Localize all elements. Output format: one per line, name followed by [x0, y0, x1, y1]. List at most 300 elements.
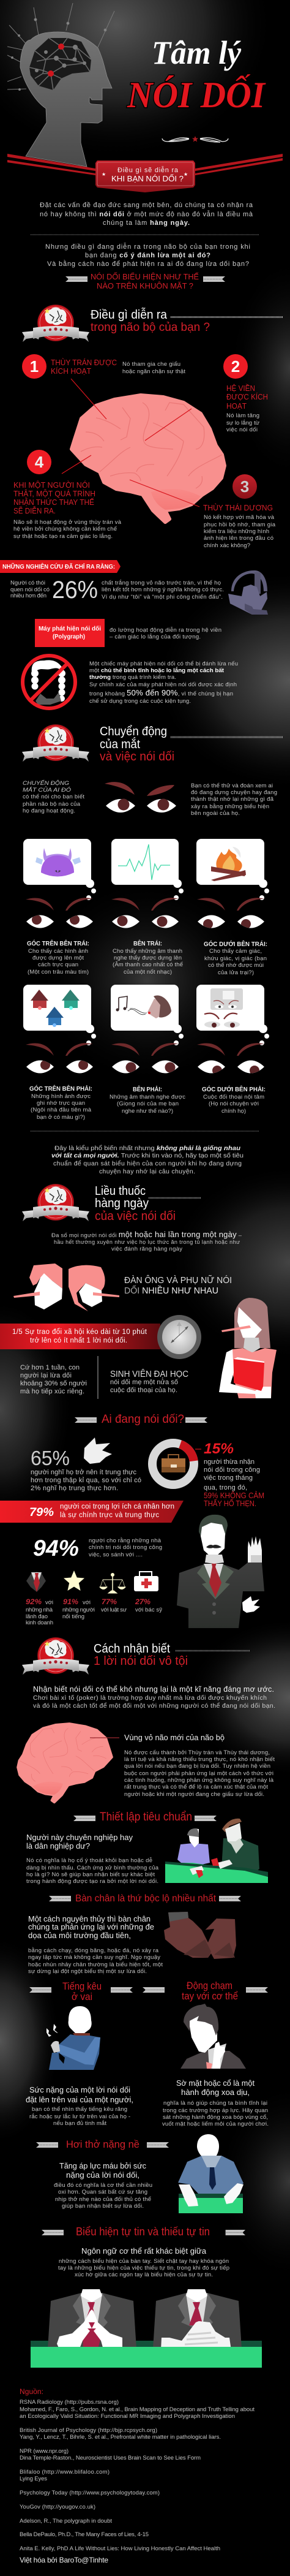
stat: 26 percent: Ví dụ như “tôi” và “một phi công chiến đấu”. — [102, 594, 223, 600]
callout 1: frontal lobe: Nó tham gia che giấu — [122, 361, 180, 368]
icon: purple buffalo — [35, 848, 81, 876]
callout 3: temporal lobe: THÙY THÁI DƯƠNG — [203, 503, 273, 512]
stat text: 15 percent at work: người thừa nhận — [204, 1458, 255, 1466]
stat: thirty percent: người lại lừa dối — [20, 1372, 72, 1379]
intro text: chúng ta làm hàng ngày. — [103, 219, 190, 227]
icon: business suit — [26, 1572, 46, 1592]
stat: college students: nói dối mẹ một nửa số — [110, 1379, 178, 1386]
heading: daily dose of lying — [95, 1184, 201, 1223]
icon: scales — [100, 1574, 125, 1593]
note paragraph — [51, 1145, 244, 1175]
baseline text: trong hành động được tạo ra bởi một lời nói dối. — [26, 1878, 158, 1885]
panel: upper right eye movement: bạn ở có màu gì?) — [37, 1114, 85, 1121]
stat: 65 percent: 65% — [31, 1447, 70, 1469]
feet text — [28, 1914, 163, 1975]
stat: college students: SINH VIÊN ĐẠI HỌC — [110, 1369, 188, 1379]
polygraph accuracy text: trong khoảng 50% đến 90%, vì thế chúng bị hạn — [89, 688, 233, 697]
feet text: Một cách nguyên thủy thì bàn chân — [28, 1914, 151, 1923]
baseline text: họ là gì? Nó sẽ giúp bạn nhận biết sự khác biệt — [26, 1871, 155, 1878]
confidence text: Ngôn ngữ cơ thể rất khác biệt giữa — [81, 2246, 207, 2256]
panel: upper left eye movement: Cho thấy các hình ảnh — [28, 948, 88, 955]
breathing text: nhịp thở nhẹ nào của đối thủ có thể — [55, 2196, 151, 2203]
icon: music and speaking face — [116, 995, 171, 1018]
note paragraph: chuyện hay nhớ lại câu chuyện. — [99, 1168, 195, 1175]
soothing text: nghĩa là nó giúp chúng ta bình tĩnh lại — [163, 2100, 267, 2107]
leader lines — [62, 379, 199, 507]
breathing text: nặng của lời nói dối, — [66, 2170, 139, 2180]
stat: 27 percent: với bác sỹ — [135, 1607, 162, 1613]
banner: research shows: NHỮNG NGHIÊN CỨU ĐÃ CHỈ RA RẰNG: — [2, 563, 115, 570]
heading: what happens in the brain: Điều gì diễn ra — [91, 308, 168, 322]
suit: confident steeple — [48, 2289, 136, 2352]
callout 3: temporal lobe: chính xác không? — [204, 542, 250, 549]
sources: Mohamed, F., Faro, S., Gordon, N. et al., Brain Mapping of Deception and Truth Telling about — [20, 2406, 255, 2413]
stat: 91 percent: những người — [62, 1607, 95, 1613]
heading: detecting a white lie: Cách nhận biết — [94, 1642, 170, 1656]
stat: 27 percent: 27% — [135, 1599, 151, 1606]
stat: 65 percent — [31, 1438, 141, 1492]
stat text: 15 percent at work: 15% — [204, 1441, 234, 1457]
heading: eye movements: của mắt — [100, 737, 140, 751]
breathing text: điều đó có nghĩa là cơ thể cần nhiều — [54, 2182, 152, 2189]
illustration: man breathing heavily at table — [178, 2134, 244, 2213]
question text: Và bằng cách nào để phát hiện ra ai đó đang lừa dối bạn? — [47, 260, 249, 268]
shoulder text: bạn có thể nhìn thấy tiếng kêu răng — [32, 2106, 127, 2113]
feet text: sự dừng lại đột ngột biểu thị một sự lừa dối. — [28, 1968, 147, 1975]
shoulder text: nếu bạn đủ tinh mắt — [53, 2120, 106, 2127]
polygraph accuracy text: một chủ thể bình tĩnh hoặc lo lắng một cách bất — [89, 667, 225, 674]
heading: feet are most revealing: Bàn chân là thứ bộc lộ nhiều nhất — [75, 1893, 217, 1904]
stat: thirty percent: khoảng 30% số người — [20, 1380, 87, 1387]
heading: men and women lie equally: DỐI NHIỀU NHƯ NHAU — [124, 1285, 218, 1296]
ornament: flourish with star — [162, 136, 228, 142]
stat: 94 percent politicians: 94% — [33, 1536, 79, 1561]
stat: 94 percent politicians: người cho rằng những nhà — [89, 1537, 162, 1544]
sources: Lying Eyes — [20, 2476, 47, 2482]
callout 1: frontal lobe: 1 — [30, 357, 39, 376]
panel: left eye movement: Cho thấy những âm thanh — [113, 948, 182, 955]
stat text: 15 percent at work: 59% KHÔNG CẢM — [204, 1491, 264, 1500]
panel: left eye movement: (Âm thanh cao nhất có thể — [113, 961, 183, 968]
icon: large eyes — [105, 782, 176, 813]
heading: daily dose of lying: Liều thuốc — [95, 1184, 146, 1198]
illustration: head with brain network — [7, 3, 114, 167]
heading: confidence: Biểu hiện tự tin và thiếu tự tin — [76, 2226, 210, 2238]
stat text: 15 percent at work: THẤY HỔ THẸN. — [204, 1499, 256, 1508]
heading: hand to body contact: tay với cơ thể — [182, 1990, 238, 2002]
stat: 92 percent — [26, 1599, 53, 1626]
chart: donut 15 percent — [152, 1443, 201, 1485]
banner: 79 percent — [0, 1501, 184, 1523]
panel: lower right eye movement: (Họ nói chuyện với — [209, 1100, 259, 1107]
heading: who is lying: Ai đang nói dối? — [102, 1413, 184, 1426]
panel: left eye movement — [111, 839, 184, 975]
callout 3: temporal lobe: kiểm tra liệu những hình — [204, 528, 269, 535]
intro text: Đặt các vấn đề đạo đức sang một bên, dù chúng ta có nhận ra — [40, 202, 253, 209]
stat: thirty percent — [20, 1364, 87, 1395]
callout 4: telling the truth: THẬT, MỘT QUÁ TRÌNH — [13, 489, 95, 498]
soothing text: hành động xoa dịu, — [181, 2088, 250, 2097]
stat: 27 percent — [135, 1599, 162, 1613]
daily lying text — [51, 1230, 242, 1252]
panel: upper left eye movement: cách trực quan — [38, 961, 78, 968]
icon: inner dialogue eyes — [204, 988, 243, 1028]
neocortex text: Vùng vỏ não mới của não bộ — [124, 1733, 225, 1742]
callout 4: telling the truth: 4 — [35, 453, 44, 471]
heading: what happens in the brain: trong não bộ của bạn ? — [91, 321, 210, 334]
red subtitle with ribbons: NÀO TRÊN KHUÔN MẶT ? — [97, 281, 193, 290]
heading: what happens in the brain — [91, 308, 283, 334]
soothing text: sát những hành động xoa bóp vùng cổ, — [163, 2114, 268, 2121]
suit: clasped hands — [153, 2289, 242, 2352]
callout 4: telling the truth: sự thật hoặc tạo ra cảm giác lo lắng. — [13, 533, 113, 540]
sources — [20, 2387, 255, 2564]
red subtitle with ribbons — [65, 272, 225, 290]
callout 2: limbic system: sự lo lắng từ — [226, 420, 260, 426]
callout 1: frontal lobe: KÍCH HOẠT — [51, 366, 91, 376]
heading: detecting a white lie — [94, 1642, 250, 1668]
illustration: man with sore shoulder — [46, 2006, 100, 2070]
stat: 94 percent politicians — [33, 1536, 162, 1561]
confidence text: xúc hờ giữa các ngón tay là biểu hiện của sự tự tin. — [75, 2271, 213, 2278]
feet text: ngay lập tức mà không cần suy nghĩ. Ngọ nguậy — [28, 1954, 160, 1961]
panel: left eye movement: của một nốt nhạc) — [124, 969, 172, 975]
stat: 65 percent: người nghĩ họ trở nên ít trung thực — [31, 1469, 137, 1476]
heading: men and women lie equally — [124, 1275, 232, 1296]
stat: 26 percent: liên kết tốt hơn những ý nghĩa không có thực. — [102, 586, 224, 593]
heading: shoulder creaks: ở vai — [72, 1991, 92, 2002]
callout 4: telling the truth — [13, 450, 122, 540]
banner: one in five: 1/5 Sự trao đổi xã hội kéo dài từ 10 phút — [12, 1328, 147, 1336]
baseline text: Nó có nghĩa là họ cố ý thoát khỏi bạn hoặc dễ — [26, 1857, 152, 1864]
soothing text: vuốt mặt hoặc liếm môi của người chơi. — [162, 2121, 269, 2127]
panel: left eye movement: nghe thấy được dựng lên — [114, 955, 182, 961]
callout 2: limbic system: việc nói dối — [226, 426, 258, 433]
panel: upper left eye movement — [23, 839, 96, 975]
stat: 92 percent: 92% — [26, 1599, 42, 1606]
heading: eye movements — [100, 725, 283, 763]
illustration: man touching neck — [180, 2004, 246, 2069]
title: Tâm lý — [152, 34, 242, 71]
icon: prohibited polygraph — [23, 656, 75, 708]
eye movement intro left: có thể nói cho bạn biết — [23, 794, 84, 800]
daily lying text: việc đánh răng hàng ngày — [111, 1246, 182, 1252]
callout 1: frontal lobe — [22, 354, 185, 379]
banner: what happens when you lie: ★ — [184, 172, 188, 177]
eye movement intro left: họ đang hoạt động. — [23, 808, 75, 814]
eye movement intro right: bên ngoài của họ. — [191, 810, 240, 817]
intro text: nó hay không thì nói dối ở một mức độ nào đó vẫn là điều mà — [40, 210, 253, 218]
icon: brain badge 2 — [22, 724, 89, 762]
stat: 91 percent — [62, 1599, 95, 1620]
title: NÓI DỐI — [127, 75, 267, 115]
neocortex text: các tình huống, những phản ứng không suy nghĩ này là — [124, 1777, 274, 1784]
baseline text: là dân nghiệp dư? — [26, 1841, 90, 1851]
sources: Yang, Y., Lencz, T., Bihrle, S. et al., Prefrontal white matter in pathological liars. — [20, 2434, 221, 2441]
stat: thirty percent: Cứ hơn 1 tuần, con — [20, 1364, 80, 1371]
note paragraph: chuẩn để quan sát biểu hiện của con người khi họ đang dựng — [53, 1160, 242, 1167]
note paragraph: Đây là kiểu phổ biến nhất nhưng không phải là giống nhau — [54, 1145, 241, 1152]
banner: one in five — [0, 1324, 160, 1349]
heading: men and women lie equally: ĐÀN ÔNG VÀ PHỤ NỮ NÓI — [124, 1275, 232, 1286]
sources: Adelson, R., The polygraph in doubt — [20, 2518, 112, 2525]
polygraph accuracy text: chế sử dụng trong các cuộc kiện tụng. — [89, 698, 191, 705]
banner: what happens when you lie: ★ — [102, 172, 106, 177]
shoulder text: đặt lên trên vai của một người, — [26, 2095, 133, 2104]
callout 1: frontal lobe: THÙY TRÁN ĐƯỢC — [51, 358, 117, 367]
eye movement intro left: MẮT CỦA AI ĐÓ — [23, 786, 72, 794]
stat: 26 percent: 26% — [52, 577, 98, 604]
panel: lower right eye movement: chính họ) — [221, 1108, 246, 1115]
illustration: boots — [164, 1912, 236, 1959]
stat: 94 percent politicians: chính trị nói dối trong công — [89, 1544, 162, 1551]
heading: eye movements: Chuyển động — [100, 725, 167, 738]
heading: who is lying — [75, 1413, 207, 1426]
stat: 77 percent — [101, 1599, 127, 1613]
callout: polygraph — [35, 619, 221, 647]
callout 1: frontal lobe: hoặc ngăn chặn sự thật — [122, 368, 185, 375]
illustration: second brain mirrored — [18, 1724, 112, 1802]
panel: upper left eye movement: (Một con trâu màu tím) — [28, 969, 89, 975]
heading: daily dose of lying: của việc nói dối — [95, 1210, 176, 1223]
shoulder text — [26, 2085, 133, 2127]
panel: left eye movement: BÊN TRÁI: — [133, 939, 162, 947]
panel: upper right eye movement: Những hình ảnh được — [31, 1093, 91, 1100]
polygraph accuracy text: thường trong quá trình kiểm tra. — [89, 674, 176, 681]
sources: RSNA Radiology (http://pubs.rsna.org) — [20, 2399, 119, 2406]
neocortex text: rất trung thực và có thể để lộ ra cảm xúc thật của một — [124, 1784, 268, 1790]
panel: upper right eye movement: GÓC TRÊN BÊN PHẢI: — [29, 1085, 92, 1093]
icon: medical kit — [134, 1572, 158, 1591]
feet text: chúng ta phản ứng lại với những đe — [28, 1922, 154, 1931]
stat text: 15 percent at work — [204, 1441, 264, 1508]
callout 2: limbic system — [223, 354, 268, 433]
note paragraph: với tất cả mọi người. Trước khi tin vào nó, hãy tạo một số tiêu — [51, 1152, 244, 1159]
panel: upper right eye movement: (Ngôi nhà đầu tiên mà — [31, 1107, 92, 1113]
panel: right eye movement: nghe như thế nào?) — [122, 1108, 173, 1115]
shoulder text: rắc hoặc sự lắc lư từ trên vai của họ - — [29, 2113, 130, 2120]
callout 4: telling the truth: NHẬN THỨC THAY THẾ — [13, 498, 94, 507]
sources: British Journal of Psychology (http://bjp.rcpsych.org) — [20, 2427, 157, 2434]
stat: 92 percent: với — [45, 1599, 53, 1606]
heading: shoulder creaks: Tiếng kêu — [62, 1980, 102, 1992]
stat: 91 percent: nổi tiếng — [62, 1613, 84, 1620]
callout 2: limbic system: HỆ VIỀN — [226, 384, 255, 393]
panel: lower left eye movement: GÓC DƯỚI BÊN TRÁI: — [204, 940, 267, 948]
icon: campfire — [211, 847, 246, 881]
illustration: confident and unconfident hands at table — [31, 2289, 262, 2368]
panel: lower right eye movement: GÓC DƯỚI BÊN PHẢI: — [202, 1085, 266, 1093]
banner: 79 percent: người coi trọng lợi ích cá nhân hơn — [60, 1503, 174, 1510]
poker paragraph — [33, 1685, 275, 1710]
callout 2: limbic system: HOẠT — [226, 402, 247, 411]
feet text: bằng cách chạy, đóng băng, hoặc đá, nó xảy ra — [28, 1947, 159, 1954]
poker paragraph: Nhận biết nói dối có thể khó nhưng lại là một kĩ năng đáng mơ ước. — [33, 1685, 274, 1694]
eye movement intro right: Bạn có thể thử và đoán xem ai — [191, 782, 273, 789]
panel: right eye movement: BÊN PHẢI: — [133, 1085, 162, 1093]
stat text: 15 percent at work: việc trong tháng — [204, 1474, 253, 1482]
intro text — [40, 202, 253, 227]
polygraph accuracy text: Một chiếc máy phát hiện nói dối có thể bị đánh lừa nếu — [89, 661, 238, 667]
callout 2: limbic system: Nó làm tăng — [226, 412, 259, 419]
neocortex text: người hoặc khi một người đang che giấu sự lừa dối. — [124, 1791, 264, 1798]
eye movement intro right: thành thật nhớ lại những gì đã — [191, 796, 274, 803]
sources: YouGov (http://yougov.co.uk) — [20, 2504, 95, 2510]
panel: lower left eye movement: Cho thấy cảm giác, — [209, 948, 262, 955]
icon: brain badge 3 — [22, 1184, 89, 1221]
icon: briefcase — [162, 1455, 185, 1472]
eye movement intro left: CHUYỂN ĐỘNG — [23, 779, 69, 787]
stat: 92 percent: kinh doanh — [26, 1619, 53, 1626]
soothing text: Sờ mặt hoặc cổ là một — [176, 2078, 255, 2088]
icon: brain badge 4 — [22, 1637, 89, 1675]
callout 4: telling the truth: Não sẽ ít hoạt động ở vùng thùy trán và — [13, 519, 122, 526]
polygraph accuracy text — [89, 661, 238, 705]
title — [127, 34, 267, 115]
eye movement intro left — [23, 779, 84, 814]
panel: upper left eye movement: được dựng lên một — [32, 955, 84, 961]
baseline text — [26, 1833, 159, 1885]
heading: shoulder creaks — [29, 1980, 133, 2002]
stat: 26 percent: chất trắng trong vỏ não trước trán, vì thế họ — [102, 580, 221, 586]
sources: Nguồn: — [20, 2387, 43, 2396]
callout 3: temporal lobe: 3 — [240, 477, 249, 496]
stat: 92 percent: lãnh đạo — [26, 1613, 48, 1620]
sources: NPR (www.npr.org) — [20, 2448, 69, 2455]
panel: right eye movement: (Giọng nói của mẹ bạn — [117, 1100, 179, 1107]
poker paragraph: Chơi bài xì tố (poker) là trường hợp duy nhất mà lừa dối được khuyến khích — [33, 1694, 267, 1702]
callout 3: temporal lobe: Nó kết hợp với mã hóa và — [204, 514, 275, 521]
illustration: politician — [177, 1515, 264, 1628]
stat: 26 percent: Người có thói — [10, 580, 45, 586]
sources: Blifaloo (http://www.blifaloo.com) — [20, 2469, 110, 2476]
stat text: 15 percent at work: qua, trong đó, — [204, 1484, 247, 1491]
soothing text: trong các trường hợp áp lực. Hãy quan — [163, 2107, 268, 2114]
illustration: man and woman with long noses — [13, 1263, 119, 1311]
panel: lower left eye movement: của lửa trại?) — [218, 969, 254, 976]
sources: an Ecologically Valid Situation: Functional MR Imaging and Polygraph Investigation — [20, 2413, 235, 2420]
stat: 77 percent: với luật sư — [101, 1607, 127, 1613]
polygraph accuracy text: Sự chính xác của máy phát hiện nói dối được xác định — [89, 681, 237, 688]
stat: 26 percent: nhiều hơn đến — [10, 593, 46, 599]
heading: hand to body contact: Động chạm — [187, 1980, 232, 1991]
stat: college students — [110, 1369, 188, 1394]
callout 3: temporal lobe: ảnh hiện lên trong đầu có — [204, 535, 273, 542]
breathing text — [54, 2161, 152, 2210]
callout 2: limbic system: ĐƯỢC KÍCH — [226, 392, 268, 401]
banner: what happens when you lie: Điều gì sẽ diễn ra — [117, 166, 179, 174]
panel: upper right eye movement: ghi nhớ trực quan — [37, 1100, 85, 1107]
soothing text — [162, 2078, 269, 2127]
icon: star — [64, 1570, 84, 1591]
ribbon lines — [7, 154, 283, 175]
stat: college students: cuộc đối thoại của họ. — [110, 1387, 177, 1394]
neocortex text: buộc con người phải phản ứng lại một cách vô thức với — [124, 1770, 273, 1777]
panel: lower left eye movement: có thể nhớ được mùi — [208, 962, 264, 969]
stat: 26 percent: quen nói dối có — [10, 586, 50, 593]
neocortex text: là trí tuệ và khả năng thiếu trung thực, nó khó nhận biết — [124, 1756, 275, 1763]
illustration: woman with book — [219, 1298, 277, 1398]
confidence text — [58, 2246, 229, 2278]
confidence text: tay là những biểu hiện của việc thiếu tự tin, trong khi đó sự tiếp — [58, 2265, 229, 2271]
icon: brain badge 1 — [22, 305, 89, 342]
sources: Anita E. Kelly, PhD A Life Without Lies: How Living Honestly Can Affect Health — [20, 2545, 220, 2552]
panel: right eye movement — [110, 985, 185, 1115]
stat: 92 percent: những nhà — [26, 1607, 53, 1613]
shoulder text: Sức nặng của một lời nói dối — [29, 2085, 130, 2094]
icon: three houses — [31, 990, 80, 1027]
heading: establish a baseline: Thiết lập tiêu chuẩn — [100, 1811, 192, 1824]
baseline text: dàng bị nhìn thấu. Cách ứng xử bình thường của — [26, 1865, 159, 1871]
panel: lower left eye movement: khứu giác, vị giác (bạn — [204, 955, 267, 962]
heading: hand to body contact — [143, 1980, 268, 2002]
banner: what happens when you lie: KHI BẠN NÓI DỐI ? — [111, 174, 184, 183]
neocortex text: qua lời nói nếu bạn đang bị lừa dối. Tuy nhiên hệ viền — [124, 1763, 270, 1770]
sources: Psychology Today (http://www.psychologytoday.com) — [20, 2490, 160, 2496]
banner: what happens when you lie — [95, 161, 195, 192]
breathing text: giúp bạn nhận biết sự lừa dối. — [62, 2203, 144, 2210]
daily lying text: Đa số mọi người nói dối một hoặc hai lần trong một ngày – — [51, 1230, 242, 1239]
confidence text: những cách biểu hiện của bàn tay. Siết chặt tay hay khóa ngón — [59, 2258, 229, 2265]
neocortex text — [124, 1733, 275, 1798]
panel: lower right eye movement — [196, 985, 269, 1115]
banner: one in five: trở lên có ít nhất 1 lời nói dối. — [30, 1337, 127, 1344]
heading: heavy breathing — [36, 2138, 169, 2150]
banner: 79 percent: 79% — [29, 1506, 54, 1519]
banner: research shows — [0, 560, 121, 573]
callout 3: temporal lobe — [203, 474, 276, 549]
callout 4: telling the truth: hệ viền bởi chúng không cần kiểm chế — [13, 526, 117, 532]
icon: clock — [157, 1315, 201, 1359]
panel: upper left eye movement: GÓC TRÊN BÊN TRÁI: — [27, 939, 89, 947]
eye movement intro right: đó đang dựng chuyện hay đang — [191, 789, 277, 796]
red subtitle with ribbons: NÓI DỐI BIỂU HIỆN NHƯ THẾ — [91, 272, 199, 281]
poker paragraph: và đó là một cách tốt để một đối một với những người có thể đang nói dối bạn. — [33, 1702, 275, 1710]
eye movement intro right — [191, 782, 277, 817]
banner: 79 percent: là sự chính trực và trung thực — [60, 1512, 159, 1519]
breathing text: oxi hơn. Quan sát bất cứ sự tăng — [58, 2189, 147, 2195]
stat: 65 percent: hơn trong thập kỉ qua, so với chỉ có — [31, 1477, 141, 1484]
panel: right eye movement: Những âm thanh nghe được — [110, 1094, 185, 1100]
question text — [45, 243, 250, 268]
illustration: poker players — [165, 1819, 268, 1883]
stat: 91 percent: 91% — [63, 1599, 78, 1606]
sources: Dina Temple-Raston., Neuroscientist Uses Brain Scan to See Lies Form — [20, 2455, 201, 2461]
sources: Việt hóa bởi BaroTo@Tinhte — [20, 2556, 108, 2564]
question text: bạn đang cố ý đánh lừa một ai đó? — [85, 252, 210, 259]
baseline text: Người này chuyên nghiệp hay — [26, 1833, 133, 1842]
panel: lower right eye movement: Cuộc đối thoại nội tâm — [203, 1094, 264, 1100]
callout: polygraph: đo lường hoạt động diễn ra trong hệ viền — [110, 627, 221, 634]
heading: eye movements: và việc nói dối — [100, 750, 174, 763]
stat: 94 percent politicians: việc, so sánh với .... — [89, 1551, 143, 1558]
feet text: dọa của môi trường đầu tiên, — [28, 1931, 131, 1940]
panel: upper right eye movement — [23, 985, 96, 1121]
neocortex text: Nó được cấu thành bởi Thùy trán và Thùy thái dương, — [124, 1749, 270, 1756]
stat: 26 percent — [10, 577, 224, 604]
heading: daily dose of lying: hàng ngày — [95, 1197, 149, 1210]
illustration: main brain — [72, 395, 225, 522]
callout 4: telling the truth: KHI MỘT NGƯỜI NÓI — [13, 480, 90, 490]
callout: polygraph: Máy phát hiện nói dối — [39, 625, 101, 632]
icon: pilot helmet — [228, 570, 268, 615]
callout 4: telling the truth: SẼ DIỄN RA. — [13, 506, 56, 515]
stat: 91 percent: với — [83, 1599, 91, 1606]
stat: 77 percent: 77% — [102, 1599, 117, 1606]
stat: 65 percent: 2% nghĩ họ trung thực hơn. — [31, 1485, 118, 1492]
callout: polygraph: – cảm giác lo lắng của đối tượng. — [110, 634, 201, 640]
heading: detecting a white lie: 1 lời nói dối vô tội — [94, 1654, 188, 1668]
